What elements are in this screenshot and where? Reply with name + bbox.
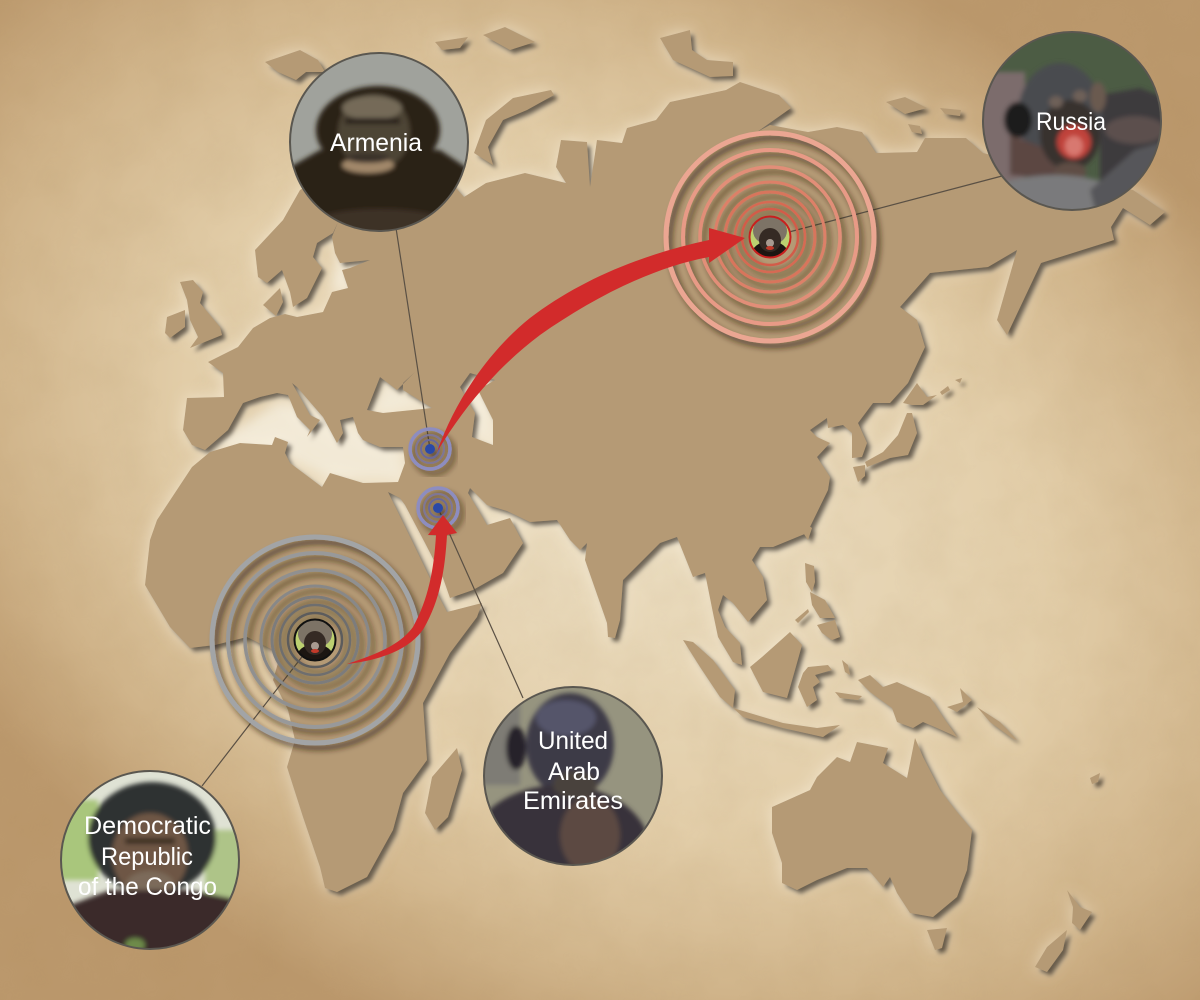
- island: Severnaya Zemlya: [660, 30, 733, 77]
- target rings: Russia: [666, 133, 874, 341]
- island: Visayas: [810, 592, 835, 618]
- island: New Zealand: [1035, 890, 1092, 972]
- island: Denmark: [263, 288, 283, 316]
- island: Sulawesi: [798, 665, 832, 707]
- island: Tasmania: [927, 928, 947, 950]
- island: New Britain: [947, 688, 972, 712]
- island: Mindanao: [817, 620, 840, 640]
- landmass: Australia: [772, 738, 972, 917]
- island: Palawan: [795, 609, 809, 623]
- photo: bonobo, Congo target: [296, 620, 334, 660]
- portrait: Armenia: [289, 52, 469, 232]
- line: DRC: [202, 640, 315, 786]
- label: Democratic Republic of the Congo: Democratic: [84, 812, 211, 840]
- island: Kuril chain: [940, 378, 962, 395]
- photo ring: Russia: [750, 216, 790, 258]
- label: Democratic Republic of the Congo: of the Congo: [78, 873, 217, 901]
- island: Java: [733, 708, 840, 737]
- island: Great Britain: [180, 280, 222, 348]
- label: Russia: Russia: [1036, 108, 1106, 136]
- island: Fiji: [1090, 773, 1100, 784]
- island: Taiwan: [804, 524, 812, 540]
- arrow: Congo to UAE: [347, 515, 457, 664]
- label: Armenia: Armenia: [330, 129, 422, 157]
- label: Democratic Republic of the Congo: [78, 812, 217, 901]
- line: UAE: [438, 508, 523, 698]
- island: Borneo: [750, 632, 802, 698]
- island: Franz Josef Land: [435, 27, 535, 50]
- line: Armenia: [396, 228, 430, 449]
- label: United Arab Emirates: United: [538, 727, 608, 755]
- island: Moluccas: [835, 660, 862, 700]
- label: United Arab Emirates: Emirates: [523, 787, 623, 815]
- line: Russia: [770, 176, 1002, 237]
- photo ring: Congo: [294, 620, 336, 660]
- arrow: Armenia to Russia: [437, 228, 745, 452]
- landmass: Eurasia and Africa: [145, 82, 1165, 892]
- island: Solomon Islands: [977, 707, 1017, 740]
- island: New Guinea: [858, 675, 957, 737]
- island: Kyushu: [853, 465, 865, 482]
- target rings: Democratic Republic of the Congo: [212, 537, 418, 743]
- target rings: UAE stop: [418, 488, 458, 528]
- island: Novaya Zemlya: [474, 90, 554, 165]
- target rings: Armenia stop: [410, 429, 450, 469]
- portrait: Russia: [982, 31, 1162, 211]
- island: Hokkaido: [903, 383, 937, 405]
- label: United Arab Emirates: [523, 727, 623, 815]
- island: Honshu: [865, 413, 917, 467]
- island: Svalbard: [265, 50, 325, 80]
- connector lines: [202, 176, 1002, 786]
- label: Democratic Republic of the Congo: Republic: [101, 843, 193, 871]
- portrait: United Arab Emirates: [483, 686, 663, 866]
- label: United Arab Emirates: Arab: [548, 758, 600, 786]
- island: Ireland: [165, 310, 185, 338]
- island: Madagascar: [425, 748, 462, 830]
- portrait: Democratic Republic of the Congo: [60, 770, 240, 950]
- island: New Siberian: [886, 97, 961, 134]
- island: Luzon: [805, 563, 815, 592]
- island: Sumatra: [683, 640, 735, 708]
- photo: bonobo, Russia target: [750, 218, 790, 256]
